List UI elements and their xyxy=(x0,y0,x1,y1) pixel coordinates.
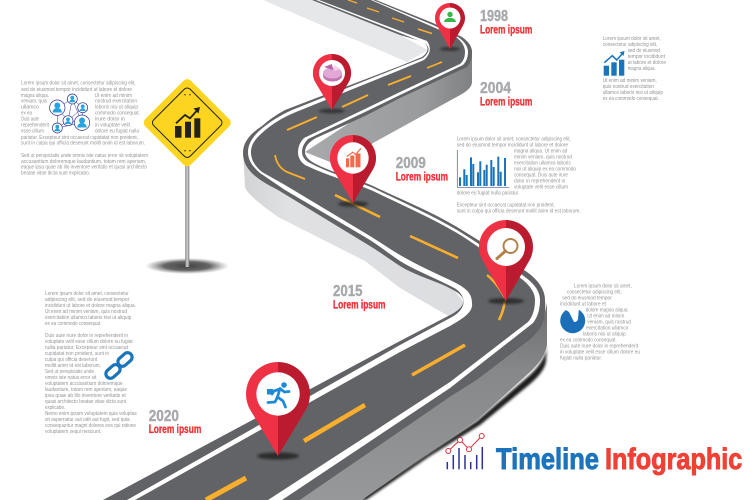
text block: beside bar chart: minim veniam, quis nostrud xyxy=(514,154,572,160)
text block: lower left: quasi architecto beatae vitae dicta sunt xyxy=(45,399,127,405)
text block: lower right: veniam, quis nostrud xyxy=(587,320,631,326)
bar chart xyxy=(457,150,509,187)
text block: beside bar chart: exercitation ullamco laboris xyxy=(514,160,571,166)
title: Timeline xyxy=(496,443,599,476)
text block: upper left: sed do eiusmod tempor incididunt ut labore et dolore xyxy=(21,87,132,93)
text block: upper right: ex ea commodo consequat. xyxy=(603,96,659,102)
text block: upper left: irure dolor in xyxy=(95,116,125,122)
text block: beside bar chart: voluptate velit esse cillum xyxy=(514,184,568,190)
text block: lower right: sed do eiusmod tempor xyxy=(562,296,612,302)
label: 2020 xyxy=(149,408,201,436)
text block: lower left: Ut enim ad minim veniam, quis nostrud xyxy=(45,309,127,315)
text block: upper right: magna aliqua. xyxy=(628,66,656,72)
text block: lower left: laudantium, totam rem aperiam, eaque xyxy=(45,387,127,393)
text block: upper left: Lorem ipsum dolor sit amet, consectetur adipiscing elit, xyxy=(21,80,136,86)
text block: lower left: omnis iste natus error sit xyxy=(45,375,97,381)
text block: lower right: Duis aute irure dolor in reprehenderit xyxy=(560,344,639,350)
text block: beside bar chart: Excepteur sint occaecat cupidatat non proident, xyxy=(457,202,555,208)
pin 2004 xyxy=(313,54,351,113)
label: 2020: Lorem ipsum xyxy=(149,424,201,436)
text block: upper left: Ut enim ad minim xyxy=(94,93,132,99)
label: 2009 xyxy=(396,155,448,184)
text block: lower left: explicabo. xyxy=(45,405,65,411)
text block: lower left: sit aspernatur aut odit aut fugit, sed quia xyxy=(45,417,130,423)
text block: lower left: adipiscing elit, sed do eiusmod tempor xyxy=(45,297,130,303)
label: 2009: 2009 xyxy=(396,155,426,172)
text block: upper left: reprehenderit xyxy=(21,122,50,128)
text block: upper right: tempor incididunt xyxy=(628,54,666,60)
text block: lower right: laboris nisi ut aliquip xyxy=(583,332,626,338)
text block: lower left: voluptatem sequi nesciunt. xyxy=(45,429,101,435)
text block: lower left: nulla pariatur. Excepteur sint occaecat xyxy=(45,345,129,351)
text block: upper left: dolore eu fugiat nulla xyxy=(95,128,139,134)
road: winding asphalt surface with white edge lines xyxy=(103,0,545,500)
text block: lower right: incididunt ut labore et xyxy=(560,302,607,308)
sign pole xyxy=(185,160,189,267)
icon: pie chart xyxy=(323,64,342,82)
text block: lower left: consequuntur magni dolores eos qui ratione xyxy=(45,423,136,429)
label: 2009: Lorem ipsum xyxy=(396,172,448,184)
text block: upper left: ex ea xyxy=(21,110,32,116)
text block: upper right: Ut enim ad minim veniam, xyxy=(603,78,657,84)
sign icon: growth chart xyxy=(175,94,200,151)
text block: lower right: in voluptate velit esse cillum dolore eu xyxy=(560,350,640,356)
label: 2004: 2004 xyxy=(480,80,511,97)
icon: orange bar chart xyxy=(346,148,361,167)
icon: magnifier xyxy=(497,239,518,258)
text block: beside bar chart: Lorem ipsum dolor sit amet, consectetur adipiscing elit, xyxy=(457,136,571,142)
text block: lower left: exercitation ullamco laboris nisi ut aliquip xyxy=(45,315,132,321)
text block: lower left: Duis aute irure dolor in reprehenderit in xyxy=(45,333,128,339)
text block: upper right: consectetur adipiscing elit, xyxy=(603,42,657,48)
text block: upper left: eaque ipsa quae ab illo inventore veritatis et quasi architecto xyxy=(21,164,147,170)
pin 2009 xyxy=(330,135,376,207)
road: yellow centre dashes xyxy=(206,0,505,500)
text block: beside bar chart: nisi ut aliquip ex ea commodo xyxy=(514,166,576,172)
label: 1998: 1998 xyxy=(480,8,508,25)
icon: blue pie xyxy=(560,306,585,333)
title xyxy=(496,443,742,476)
label: 1998 xyxy=(480,8,532,36)
text block: beside bar chart: consequat. Duis aute irure xyxy=(514,172,568,178)
sign board xyxy=(142,77,233,168)
pin 2015 xyxy=(479,220,533,304)
label: 2015 xyxy=(333,283,386,312)
text block: upper right: sed do eiusmod xyxy=(628,48,660,54)
text block: upper left: veniam, quis xyxy=(21,98,47,104)
label: 2015: 2015 xyxy=(333,283,363,300)
text block: upper left: commodo consequat. xyxy=(95,110,140,116)
text block: lower left: ex ea commodo consequat. xyxy=(45,321,101,327)
text block: upper left: ullamco xyxy=(21,104,39,110)
text block: upper right: quis nostrud exercitation xyxy=(603,84,654,90)
pin 1998 xyxy=(435,3,465,51)
text block: upper left: pariatur. Excepteur sint occaecat cupidatat non proident, xyxy=(21,135,138,141)
text block: beside bar chart: sunt in culpa qui officia deserunt mollit anim id est laborum. xyxy=(457,208,581,214)
text block: beside bar chart: sed do eiusmod tempor incididunt ut labore et dolore xyxy=(457,142,568,148)
text block: lower right: Ut enim ad minim xyxy=(587,314,624,320)
text block: lower left: incididunt ut labore et dolore magna aliqua. xyxy=(45,303,136,309)
text block: upper right: ut labore et dolore xyxy=(628,60,666,66)
text block: beside bar chart: dolore eu fugiat nulla pariatur. xyxy=(457,190,519,196)
text block: upper left: beatae vitae dicta sunt explicabo. xyxy=(21,170,90,176)
text block: lower right: Lorem ipsum dolor sit amet, xyxy=(574,284,632,290)
icon: title chart logo xyxy=(446,434,484,469)
text block: lower left: Nemo enim ipsam voluptatem quia voluptas xyxy=(45,411,137,417)
text block: upper right xyxy=(603,36,666,102)
text block: lower right xyxy=(560,284,640,362)
text block: upper left: laboris nisi ut aliquip xyxy=(95,104,138,110)
text block: lower left: voluptate velit esse cillum dolore eu fugiat xyxy=(45,339,133,345)
text block: lower left: culpa qui officia deserunt xyxy=(45,357,98,363)
text block: upper left: Duis aute xyxy=(21,116,39,122)
text block: lower left xyxy=(45,291,137,435)
text block: lower right: ex ea commodo consequat. xyxy=(560,338,617,344)
label: 2004 xyxy=(480,80,532,108)
label: 2015: Lorem ipsum xyxy=(333,300,386,312)
icon: blue growth bars xyxy=(604,51,624,76)
text block: upper left: nostrud exercitation xyxy=(95,98,137,104)
text block: lower right: exercitation ullamco xyxy=(586,326,629,332)
text block: lower left: Sed ut perspiciatis unde xyxy=(45,369,94,375)
icon: running businessman xyxy=(267,382,289,407)
pin 2020 xyxy=(246,362,310,460)
road sign xyxy=(142,77,233,274)
text block: beside bar chart xyxy=(457,136,581,214)
icon: people network xyxy=(50,94,90,133)
text block: upper left: sunt in culpa qui officia deserunt mollit anim id est laborum. xyxy=(21,140,145,146)
text block: upper left: esse cillum xyxy=(21,128,44,134)
sign shadow xyxy=(145,258,229,274)
text block: upper right: Lorem ipsum dolor sit amet, xyxy=(603,36,661,42)
text block: upper left: accusantium doloremque laudantium, totam rem aperiam, xyxy=(21,159,146,165)
text block: upper right: ullamco laboris nisi ut aliquip xyxy=(603,90,663,96)
text block: lower right: fugiat nulla pariatur. xyxy=(560,356,602,362)
road: side walls xyxy=(243,0,547,500)
text block: lower left: voluptatem accusantium doloremque xyxy=(45,381,123,387)
text block: lower right: dolore magna aliqua. xyxy=(586,308,629,314)
text block: beside bar chart: magna aliqua. Ut enim ad xyxy=(514,148,567,154)
text block: lower left: Lorem ipsum dolor sit amet, consectetur xyxy=(45,291,129,297)
text block: beside bar chart: dolor in reprehenderit in xyxy=(514,178,566,184)
text block: upper left xyxy=(21,80,148,176)
text block: upper left: in voluptate velit xyxy=(95,122,131,128)
text block: upper left: Sed ut perspiciatis unde omnis iste natus error sit voluptatem xyxy=(21,153,148,159)
icon: person xyxy=(444,12,456,22)
text block: lower left: ipsa quae ab illo inventore veritatis et xyxy=(45,393,126,399)
label: 1998: Lorem ipsum xyxy=(480,24,532,36)
icon: chain link xyxy=(104,351,134,380)
text block: lower left: cupidatat non proident, sunt in xyxy=(45,351,109,357)
text block: lower right: consectetur adipiscing elit, xyxy=(567,290,622,296)
label: 2020: 2020 xyxy=(149,408,179,425)
text block: lower left: mollit anim id est laborum. xyxy=(45,363,101,369)
text block: upper left: magna aliqua. xyxy=(21,93,49,99)
label: 2004: Lorem ipsum xyxy=(480,96,532,108)
